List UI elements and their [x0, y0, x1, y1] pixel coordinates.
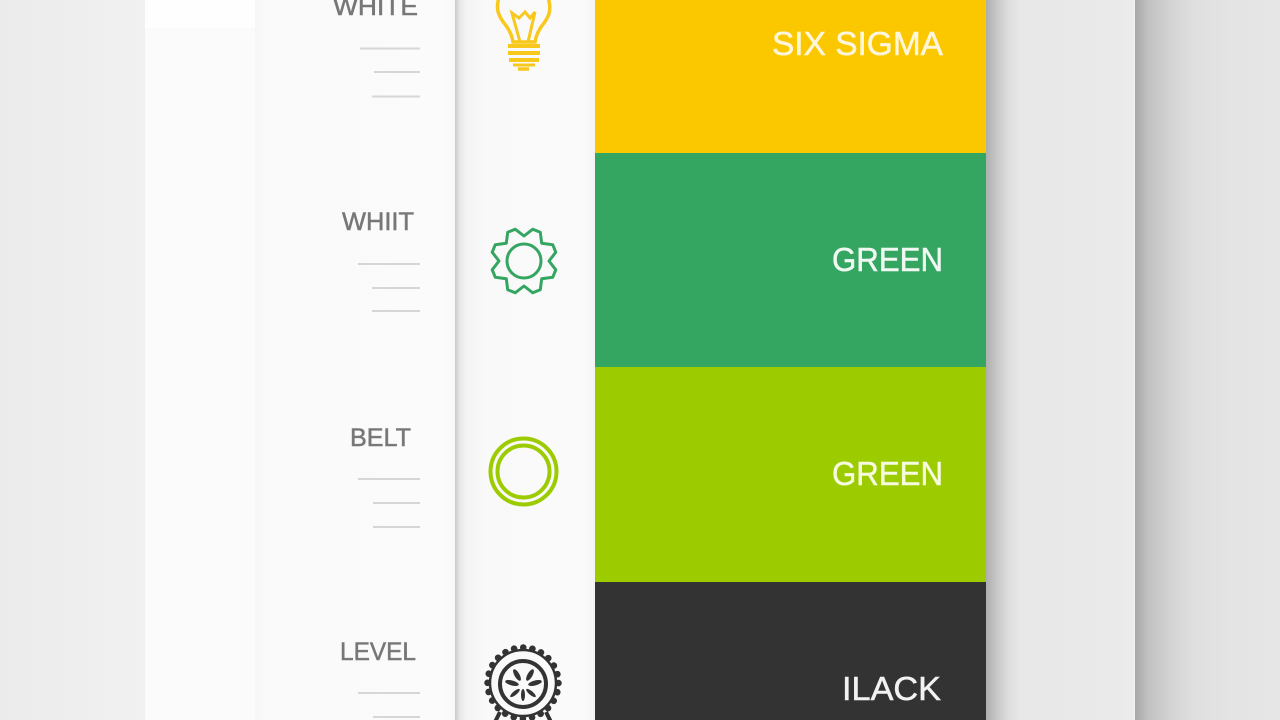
panel: far left sheet	[145, 0, 255, 720]
icon: gear	[492, 229, 556, 293]
icon: light bulb	[497, 0, 550, 69]
text lines: first row	[360, 48, 420, 96]
panel: black band	[595, 582, 986, 720]
panel: dark green band	[595, 153, 986, 367]
icon: rosette badge	[488, 648, 558, 720]
heading: lime green: GREEN	[832, 455, 943, 492]
label: white: WHIIT	[342, 208, 414, 236]
label: belt: BELT	[350, 424, 411, 452]
heading: six sigma: SIX SIGMA	[772, 25, 943, 62]
panel: right backdrop with shadow	[1135, 0, 1280, 720]
text lines: fourth row	[358, 693, 420, 717]
text lines: second row	[358, 264, 420, 311]
icon: ring	[490, 438, 556, 504]
panel: lime band	[595, 367, 986, 582]
label: level: LEVEL	[340, 638, 416, 666]
panel: far left top highlight	[145, 0, 255, 28]
panel: yellow band	[595, 0, 986, 153]
panel: right sheet	[985, 0, 1135, 720]
panel: label column	[255, 0, 455, 720]
text lines: third row	[358, 479, 420, 527]
panel: icon column	[455, 0, 595, 720]
heading: green: GREEN	[832, 241, 943, 278]
heading: black: ILACK	[842, 670, 941, 707]
